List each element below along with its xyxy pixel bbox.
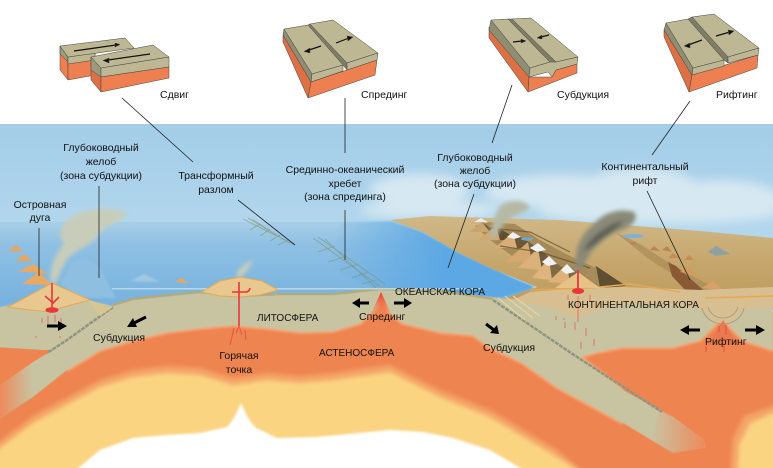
label: continental rift: рифт [633,175,658,187]
ocean [0,222,540,312]
mountain range [470,218,626,290]
label: island arc: Островная [14,199,66,211]
subduction slab edges [47,300,662,412]
label: block captions [160,89,758,101]
label: left trench: (зона субдукции) [60,170,142,182]
magma: spreading cone [371,292,391,314]
motion arrows [47,298,765,335]
continental land [390,216,773,310]
label: left trench: Глубоководный [63,142,139,154]
label: right trench: Глубоководный [437,152,513,164]
intermediate mantle layer [0,365,773,468]
white core [70,403,532,468]
crust strata [530,284,773,298]
label: block captions: Спрединг [361,89,408,101]
continental volcano smoke [490,201,636,272]
magma: hot spot [230,282,250,345]
label: continental crust: КОНТИНЕНТАЛЬНАЯ КОРА [568,300,699,311]
magma: island arc [36,283,61,338]
lithosphere [0,290,773,453]
label: mid-ocean ridge: хребет [328,178,362,190]
left slab fading tip [0,362,33,418]
label: continental rift: Континентальный [601,161,689,173]
small seamount [175,278,189,283]
label: transform fault: Трансформный [178,170,254,182]
continental crust [513,287,773,324]
label: hot spot: точка [226,364,252,376]
strata at trench [498,296,540,320]
seamounts [60,258,160,298]
label: transform fault: разлом [198,184,234,196]
label: lithosphere: ЛИТОСФЕРА [257,313,319,324]
rift valley [615,232,740,312]
label: hot spot: Горячая [219,350,259,362]
left mantle wedge [0,347,53,388]
label: right trench: (зона субдукции) [434,178,516,190]
label: left trench: желоб [86,156,116,168]
leader lines [39,85,690,280]
block diagram: spreading [283,20,378,98]
label: asthenosphere: АСТЕНОСФЕРА [319,348,395,359]
yellow mantle layer [0,372,773,468]
label: block captions: Сдвиг [160,89,189,101]
near ocean shelf [330,221,537,298]
deep mantle orange [0,296,773,468]
magma: rift cone [706,320,738,352]
label: block captions: Субдукция [557,89,609,101]
lithosphere halo [67,292,773,423]
volcano plumes [50,209,254,284]
oceanic crust strip [113,289,493,305]
label: right trench: желоб [460,165,490,177]
transform fault ridges [243,218,385,288]
label: spreading: Спрединг [359,311,406,323]
label: mid-ocean ridge: Срединно-океанический [286,164,404,176]
magma: continental volcano [556,270,594,349]
right slab fading tip [650,408,705,453]
hot spot island [202,277,278,297]
label: block captions: Рифтинг [716,89,758,101]
pale water line [112,288,482,290]
sky [0,124,773,254]
block diagram: strike-slip [60,38,169,92]
label: island arc: дуга [30,212,51,224]
label: mid-ocean ridge: (зона спрединга) [304,191,386,203]
clouds [360,168,773,224]
label: oceanic crust: ОКЕАНСКАЯ КОРА [395,287,485,298]
island arc [8,245,113,316]
label: right subduction: Субдукция [483,342,535,354]
rift fracture [702,307,744,324]
label: rifting: Рифтинг [705,336,747,348]
continental volcano cone [555,272,600,288]
block diagram: subduction [489,18,578,92]
block diagram: rifting [664,14,759,92]
label: left subduction: Субдукция [93,332,145,344]
